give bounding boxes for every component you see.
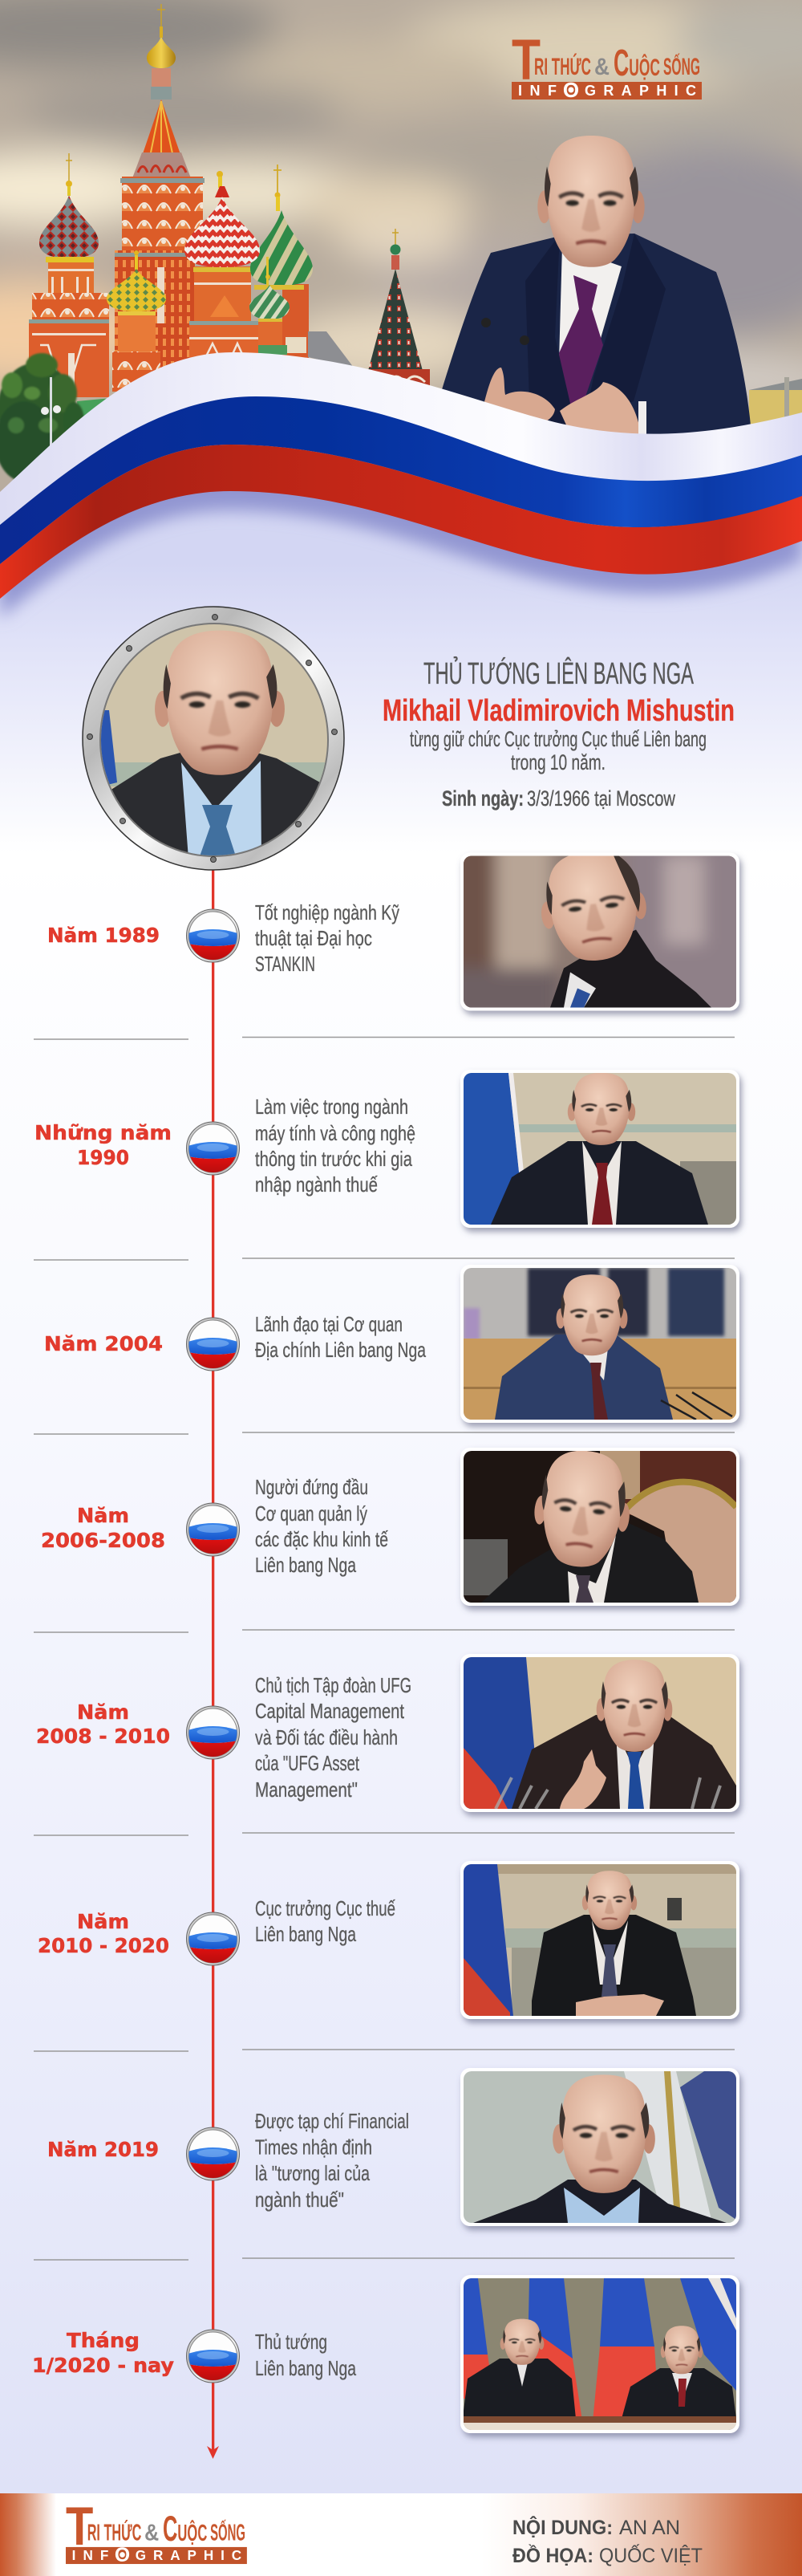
- cathedral: gray building: [308, 331, 354, 368]
- year label: Năm: [77, 1504, 129, 1527]
- microphones: [445, 323, 525, 410]
- description: [255, 1673, 411, 1802]
- cathedral: small green dome: [249, 257, 304, 355]
- description: thuật tại Đại học: [255, 926, 372, 950]
- credits: AN AN: [619, 2517, 680, 2539]
- event: 2019: [47, 2068, 739, 2226]
- footer band: [0, 2493, 802, 2576]
- logo: Trí Thức & Cuộc Sống Infographic (header): RI THỨC: [534, 53, 591, 80]
- description: Liên bang Nga: [255, 2356, 356, 2380]
- logo: Trí Thức & Cuộc Sống Infographic (footer): SỐNG: [210, 2518, 245, 2546]
- logo: Trí Thức & Cuộc Sống Infographic (footer): CUỘC: [163, 2509, 207, 2549]
- description: [410, 727, 707, 774]
- description: [255, 1896, 395, 1946]
- year label: 1/2020 - nay: [32, 2354, 174, 2377]
- event: 1/2020 - now: [32, 2275, 739, 2433]
- description: Làm việc trong ngành: [255, 1095, 408, 1119]
- year label: Năm 2019: [47, 2138, 159, 2161]
- cathedral: yellow dome tower: [107, 250, 166, 392]
- logo: Trí Thức & Cuộc Sống Infographic (header): T: [512, 29, 541, 92]
- year label: 2010 - 2020: [38, 1934, 169, 1957]
- portrait: Mishustin speaking: [439, 136, 751, 449]
- logo: Trí Thức & Cuộc Sống Infographic (footer): INF: [72, 2547, 108, 2563]
- photo: [460, 1447, 739, 1606]
- description: Lãnh đạo tại Cơ quan: [255, 1312, 403, 1336]
- event: 2004: [44, 1265, 739, 1423]
- description: Liên bang Nga: [255, 1922, 356, 1946]
- description: Chủ tịch Tập đoàn UFG: [255, 1673, 411, 1697]
- description: STANKIN: [255, 952, 315, 976]
- flag marker: [186, 1706, 239, 1759]
- year label: Năm 1989: [47, 924, 160, 947]
- photo: [460, 2068, 739, 2226]
- logo: Trí Thức & Cuộc Sống Infographic (footer): GRAPHIC: [136, 2547, 241, 2563]
- year label: [36, 1700, 170, 1748]
- flag marker: [186, 2330, 239, 2383]
- flag marker: [186, 909, 239, 962]
- flag marker: [186, 1503, 239, 1556]
- description: là "tương lai của: [255, 2161, 370, 2185]
- medallion screws: [87, 615, 337, 862]
- background: upper gradient: [0, 385, 802, 853]
- logo: Trí Thức & Cuộc Sống Infographic (header): &: [594, 54, 610, 80]
- year label: [34, 1121, 172, 1169]
- photo: [460, 1265, 739, 1423]
- sky with clouds: [0, 0, 802, 522]
- cathedral: rear right chapel: [282, 284, 309, 358]
- description: thông tin trước khi gia: [255, 1147, 412, 1171]
- logo: Trí Thức & Cuộc Sống Infographic (footer): &: [144, 2520, 159, 2546]
- cathedral: central dome stripes: [184, 197, 260, 267]
- year label: 2008 - 2010: [36, 1725, 170, 1748]
- timeline axis with arrow: [207, 869, 219, 2459]
- year label: Năm 2004: [44, 1332, 163, 1355]
- logo: Trí Thức & Cuộc Sống Infographic (header): INF: [518, 83, 557, 99]
- year label: Năm: [77, 1700, 129, 1724]
- description: Liên bang Nga: [255, 1553, 356, 1577]
- birth date: [442, 786, 675, 811]
- year label: [32, 2329, 174, 2377]
- year label: Những năm: [34, 1121, 172, 1144]
- flag ribbon: [0, 352, 802, 618]
- intro text block: [383, 656, 735, 811]
- description: của "UFG Asset: [255, 1751, 360, 1775]
- description: [255, 2109, 409, 2212]
- year label: [41, 1504, 165, 1552]
- flag marker: [186, 2127, 239, 2180]
- description: và Đối tác điều hành: [255, 1725, 398, 1749]
- flag marker: [186, 1912, 239, 1965]
- background: timeline gradient: [0, 853, 802, 2493]
- logo: Trí Thức & Cuộc Sống Infographic (header): CUỘC: [614, 42, 660, 83]
- event: 1990s: [34, 1070, 739, 1228]
- credits: NỘI DUNG:: [512, 2515, 613, 2539]
- cathedral: green onion dome: [250, 165, 313, 286]
- year label: Năm: [77, 1910, 129, 1933]
- cathedral: left tower: [29, 153, 109, 397]
- logo: Trí Thức & Cuộc Sống Infographic (header): GRAPHIC: [585, 83, 696, 99]
- year label: Tháng: [67, 2329, 140, 2352]
- photo: [460, 2275, 739, 2433]
- cathedral: right tower: [367, 229, 430, 395]
- description: nhập ngành thuế: [255, 1172, 378, 1197]
- event: 2006-2008: [41, 1447, 739, 1606]
- logo: Trí Thức & Cuộc Sống Infographic (footer): T: [66, 2497, 93, 2557]
- cathedral: main tower: [115, 4, 205, 375]
- description: Cục trưởng Cục thuế: [255, 1896, 395, 1920]
- logo: Trí Thức & Cuộc Sống Infographic (header): SỐNG: [663, 53, 700, 80]
- description: Được tạp chí Financial: [255, 2109, 409, 2133]
- description: [255, 1475, 388, 1577]
- description: Địa chính Liên bang Nga: [255, 1338, 426, 1362]
- description: Capital Management: [255, 1699, 405, 1723]
- cathedral: striped central dome: [189, 171, 260, 361]
- section dividers: [34, 1037, 735, 2260]
- description: các đặc khu kinh tế: [255, 1527, 388, 1551]
- description: trong 10 năm.: [511, 750, 606, 774]
- tree and lamp post: [0, 351, 107, 480]
- description: Người đứng đầu: [255, 1475, 368, 1499]
- event: 2010-2020: [38, 1861, 739, 2019]
- credits: ĐỒ HỌA:: [512, 2543, 593, 2567]
- panel: header scene: [0, 0, 802, 522]
- credits: QUỐC VIỆT: [599, 2543, 703, 2567]
- description: [255, 900, 399, 976]
- description: Times nhận định: [255, 2135, 372, 2159]
- logo: Trí Thức & Cuộc Sống Infographic (footer): [66, 2497, 247, 2566]
- logo: Trí Thức & Cuộc Sống Infographic (footer): RI THỨC: [87, 2518, 141, 2546]
- year label: [38, 1910, 169, 1957]
- description: [255, 1312, 426, 1362]
- right yellow building: [749, 377, 802, 424]
- logo: Trí Thức & Cuộc Sống Infographic (footer): O: [115, 2544, 130, 2566]
- flag marker: [186, 1122, 239, 1175]
- photo: [460, 1654, 739, 1812]
- flag marker: [186, 1318, 239, 1371]
- portrait medallion: [83, 607, 344, 870]
- event: 1989: [49, 852, 746, 1019]
- year label: 2006-2008: [41, 1529, 165, 1552]
- logo: Trí Thức & Cuộc Sống Infographic (header): [512, 29, 702, 102]
- description: [255, 2330, 356, 2380]
- year label: 1990: [77, 1146, 129, 1169]
- photo: [460, 1861, 739, 2019]
- description: Thủ tướng: [255, 2330, 327, 2354]
- birth date: 3/3/1966 tại Moscow: [527, 786, 675, 811]
- photo: [460, 1070, 739, 1228]
- credits: [512, 2515, 703, 2567]
- birth date: Sinh ngày:: [442, 786, 524, 811]
- description: [255, 1095, 415, 1197]
- description: Management": [255, 1778, 358, 1802]
- description: máy tính và công nghệ: [255, 1121, 415, 1145]
- photo: [459, 852, 746, 1019]
- description: Cơ quan quản lý: [255, 1501, 367, 1526]
- description: Tốt nghiệp ngành Kỹ: [255, 900, 399, 924]
- description: ngành thuế": [255, 2188, 344, 2212]
- event: 2008-2010: [36, 1654, 739, 1812]
- logo: Trí Thức & Cuộc Sống Infographic (header): O: [563, 78, 579, 102]
